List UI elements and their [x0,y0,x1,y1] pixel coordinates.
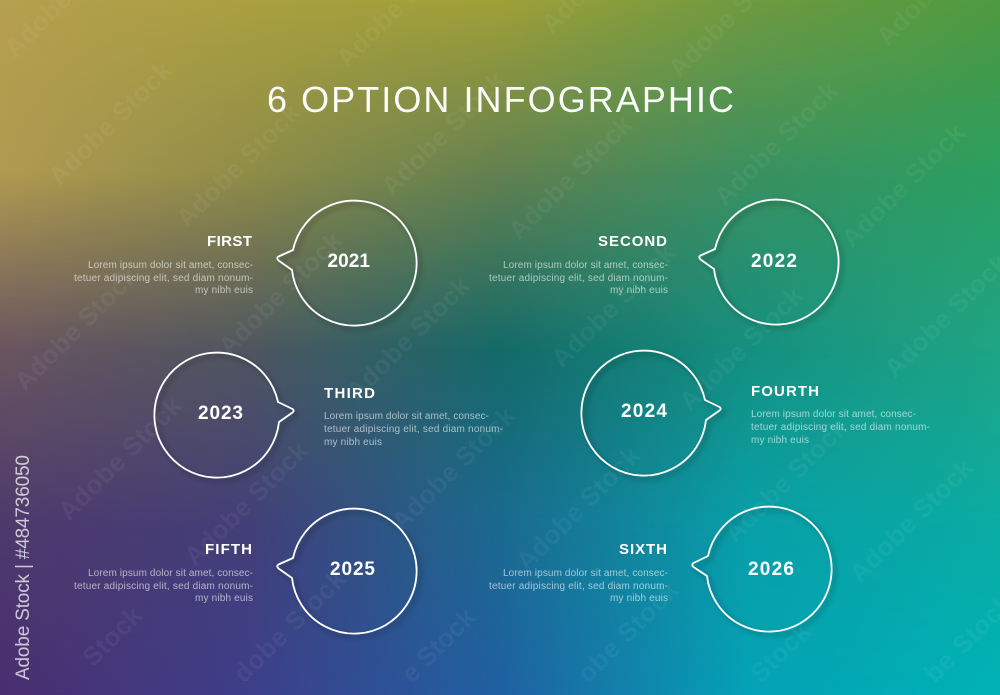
stock id vertical text: Adobe Stock | #484736050 [13,455,34,680]
heading fourth: FOURTH [751,383,819,400]
watermark pattern: Adobe Stock [8,260,144,396]
bubble 2023 [154,353,294,478]
heading second: SECOND [598,233,667,250]
body sixth: my nibh euis [610,593,668,604]
heading third: THIRD [324,385,375,402]
body third: my nibh euis [324,437,382,448]
body fourth [751,409,930,446]
heading fifth: FIFTH [205,541,252,558]
body second: Lorem ipsum dolor sit amet, consec- [503,260,668,271]
watermark pattern: Adobe Stock [52,390,188,526]
title: 6 OPTION INFOGRAPHIC [267,79,734,120]
body sixth: Lorem ipsum dolor sit amet, consec- [503,568,668,579]
body first: my nibh euis [195,285,253,296]
watermark pattern: Adobe Stock [385,400,521,536]
watermark pattern: Adobe Stock [212,225,348,361]
body third: tetuer adipiscing elit, sed diam nonum- [324,424,503,435]
body fourth: Lorem ipsum dolor sit amet, consec- [751,409,916,420]
body sixth [489,568,668,604]
year 2025: 2025 [330,559,375,580]
bubble 2026 [692,507,832,632]
watermark pattern: Adobe Stock [510,440,646,576]
option: sixth [489,507,832,632]
body sixth: tetuer adipiscing elit, sed diam nonum- [489,581,668,592]
body first: tetuer adipiscing elit, sed diam nonum- [74,273,253,284]
option: third [154,353,503,478]
option: fourth [581,351,930,476]
option: first [74,201,417,326]
heading first: FIRST [207,233,252,250]
watermark pattern: Adobe Stock [502,109,638,245]
bubble 2025 [277,509,417,634]
watermark pattern: Adobe Stock [170,97,306,233]
watermark pattern: Adobe Stock [718,412,854,548]
body third [324,411,503,448]
body fifth [74,568,253,604]
watermark pattern: Adobe Stock [340,270,476,406]
watermark pattern: Adobe Stock [673,280,809,416]
watermark pattern: Adobe Stock [42,55,178,191]
bubble 2024 [581,351,721,476]
body first [74,260,253,296]
watermark pattern: Adobe Stock [375,65,511,201]
year 2021: 2021 [328,251,370,272]
year 2026: 2026 [748,559,794,580]
watermark pattern: Stock [76,600,149,672]
body fifth: tetuer adipiscing elit, sed diam nonum- [74,581,253,592]
body fifth: my nibh euis [195,593,253,604]
watermark pattern: dobe Stock [227,563,352,688]
year 2023: 2023 [198,403,243,424]
body fourth: my nibh euis [751,435,809,446]
body fifth: Lorem ipsum dolor sit amet, consec- [88,568,253,579]
heading sixth: SIXTH [619,541,667,558]
bubble 2021 [277,201,417,326]
option: second [489,200,839,325]
watermark pattern: Adobe Stock [178,435,314,571]
body second [489,260,668,296]
body fourth: tetuer adipiscing elit, sed diam nonum- [751,422,930,433]
body second: tetuer adipiscing elit, sed diam nonum- [489,273,668,284]
watermark pattern: Adobe Stock [545,237,681,373]
watermark pattern: Adobe Stock [708,75,844,211]
body third: Lorem ipsum dolor sit amet, consec- [324,411,489,422]
watermark pattern: Adobe Stock [835,117,971,253]
bubble 2022 [699,200,839,325]
watermark pattern: Stock [744,616,817,688]
body first: Lorem ipsum dolor sit amet, consec- [88,260,253,271]
option: fifth [74,509,417,634]
year 2024: 2024 [621,401,667,422]
year 2022: 2022 [751,251,797,272]
watermark pattern: e Stock [395,602,482,688]
watermark pattern: Adobe Stock [843,452,979,588]
watermark pattern: obe Stock [571,575,685,688]
body second: my nibh euis [610,285,668,296]
